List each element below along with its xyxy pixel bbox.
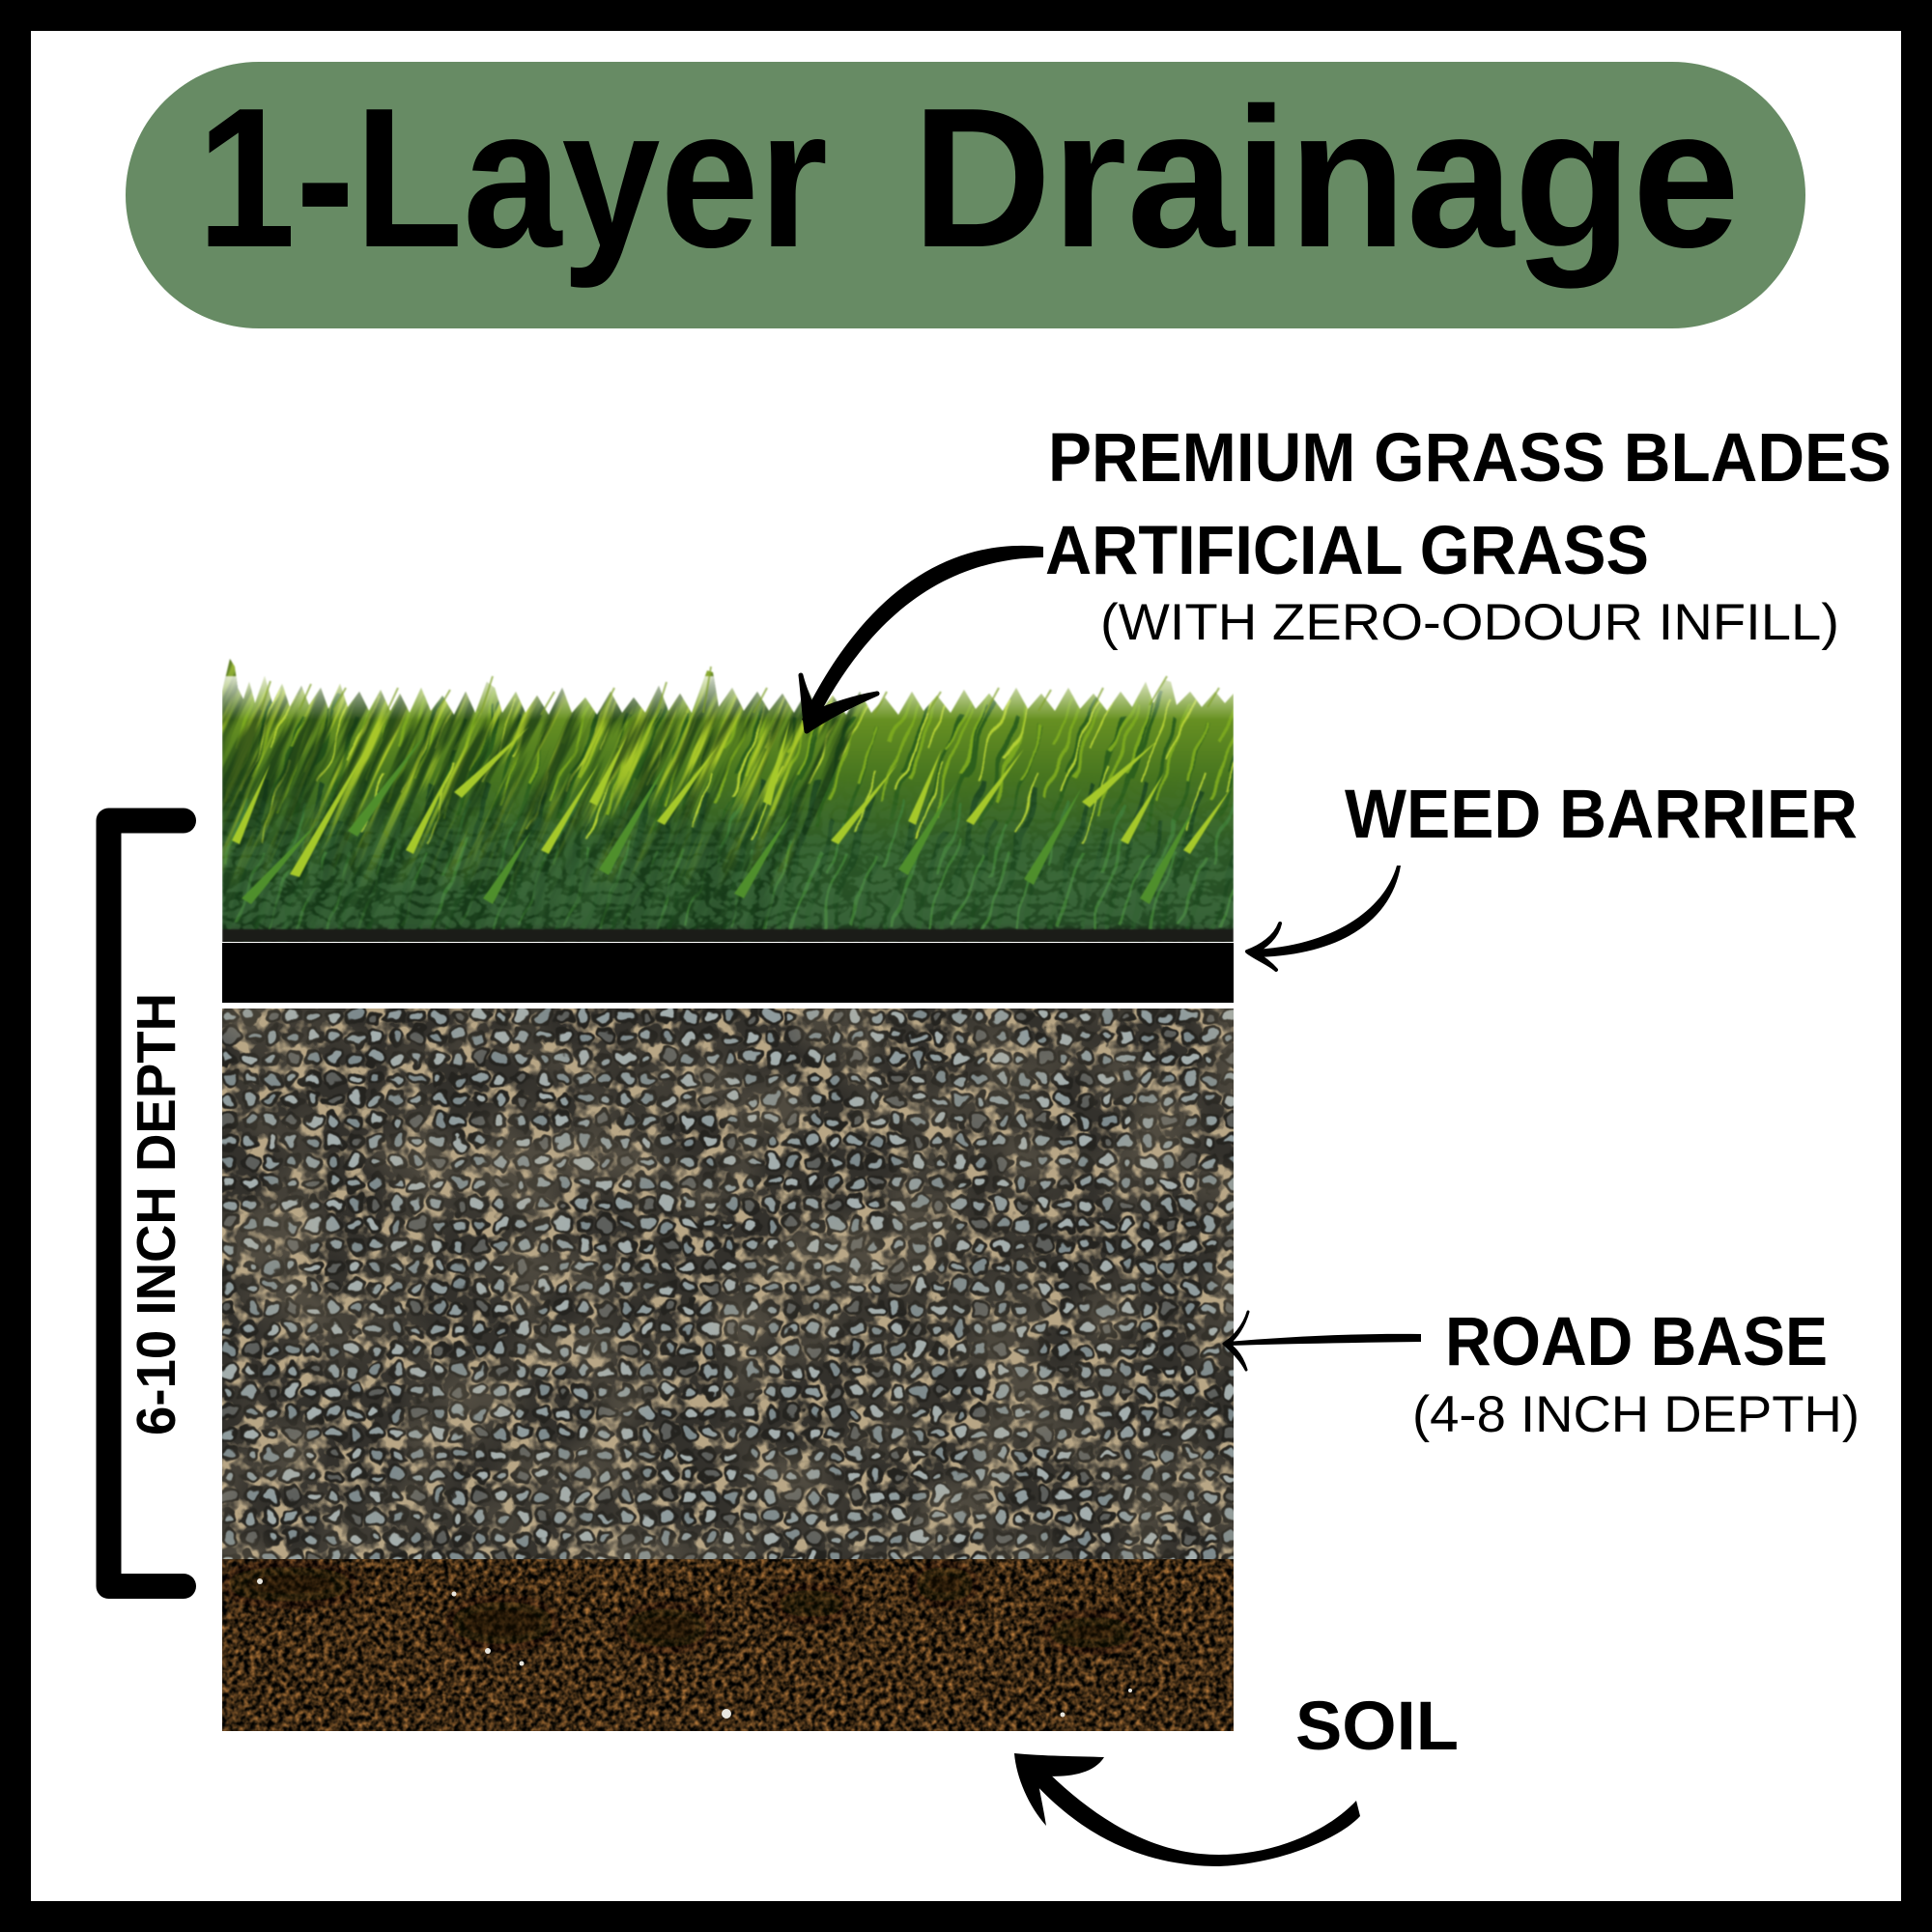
green pill background xyxy=(126,62,1805,328)
title banner xyxy=(126,62,1805,328)
arrow: to artificial grass xyxy=(801,546,1043,731)
label: road base: ROAD BASE xyxy=(1445,1304,1828,1380)
depth label: 6-10 INCH DEPTH xyxy=(126,993,187,1435)
arrow: to road base xyxy=(1224,1312,1421,1370)
layer: artificial grass xyxy=(222,659,1234,942)
title text: Drainage xyxy=(912,67,1740,289)
arrow: to soil xyxy=(1014,1753,1360,1866)
label: soil: SOIL xyxy=(1295,1689,1459,1765)
layered ground cross-section xyxy=(222,659,1234,1731)
label: weed barrier: WEED BARRIER xyxy=(1345,777,1858,853)
layer: soil xyxy=(222,1559,1234,1731)
layer: weed barrier xyxy=(222,943,1234,1003)
label: with zero-odour infill: (WITH ZERO-ODOUR INFILL) xyxy=(1100,594,1839,651)
label: artificial grass: ARTIFICIAL GRASS xyxy=(1045,513,1649,589)
label: road base depth: (4-8 INCH DEPTH) xyxy=(1412,1386,1860,1443)
label: premium grass blades: PREMIUM GRASS BLADES xyxy=(1048,420,1891,497)
arrow: to weed barrier xyxy=(1247,866,1401,970)
title text: 1-Layer xyxy=(197,67,828,289)
depth bracket xyxy=(108,821,184,1586)
layer: road base gravel xyxy=(193,980,1263,1588)
